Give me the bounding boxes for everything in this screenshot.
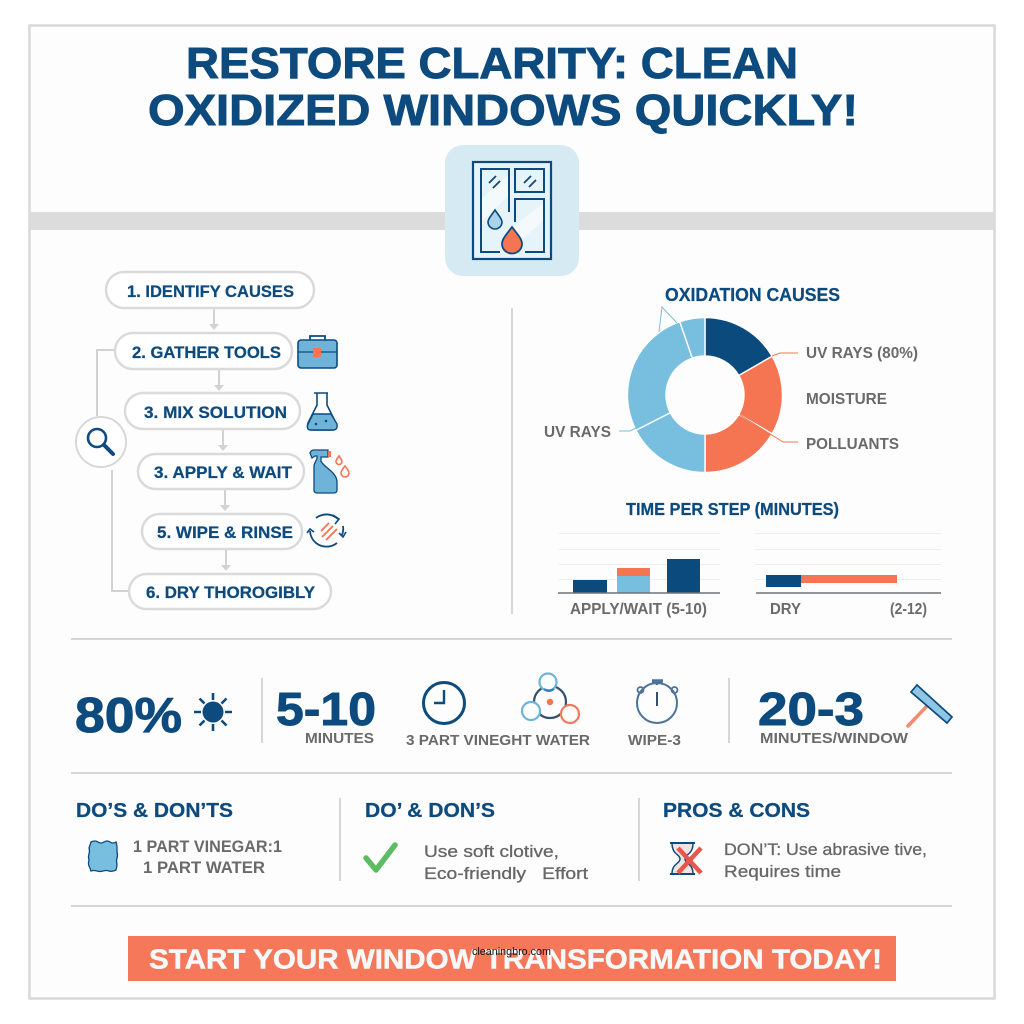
step 2 (115, 333, 292, 369)
icon: check mark (366, 845, 395, 870)
icon: wipe and rinse arrows (307, 514, 346, 547)
ratio text: 1 PART VINEGAR:1 (133, 838, 282, 856)
icon: sun (194, 693, 232, 731)
heading: PROS & CONS (663, 800, 810, 822)
heading: DO’ & DON’S (365, 800, 495, 822)
step 1: 1. IDENTIFY CAUSES (127, 283, 294, 301)
don't text (724, 840, 927, 881)
step 1 (106, 272, 314, 308)
do text: Use soft clotive, (424, 842, 559, 861)
panel: time per step (558, 499, 941, 618)
panel: process flow (76, 272, 349, 609)
title: RESTORE CLARITY: CLEAN (186, 39, 798, 88)
call to action banner (128, 936, 896, 981)
stat: vinegar water ratio: 3 PART VINEGHT WATER (406, 732, 590, 749)
stat: minutes per window: MINUTES/WINDOW (760, 730, 909, 747)
header band (30, 212, 994, 230)
panel: do's and don'ts (76, 800, 282, 877)
step 5: 5. WIPE & RINSE (157, 524, 293, 542)
chart axis labels: APPLY/WAIT (5-10) (570, 601, 707, 618)
ratio text: 1 PART WATER (143, 859, 265, 877)
chart axis labels: DRY (770, 601, 802, 618)
don't text: DON’T: Use abrasive tive, (724, 840, 927, 859)
icon: sponge (88, 841, 118, 872)
step 4: 3. APPLY & WAIT (154, 464, 292, 482)
panel: oxidation causes (544, 285, 918, 473)
panel: do and don's (365, 800, 588, 883)
stat: minutes per window (758, 683, 909, 747)
stat: 5-10 minutes: 5-10 (276, 683, 376, 735)
icon: hourglass with cross (670, 843, 701, 874)
don't text: Requires time (724, 862, 841, 881)
heading: DO’S & DON’TS (76, 800, 233, 822)
stat: minutes per window: 20-3 (758, 683, 864, 735)
heading: oxidation causes: OXIDATION CAUSES (665, 285, 840, 305)
connector lines (97, 350, 129, 591)
donut labels: POLLUANTS (806, 436, 899, 453)
chart axis labels (570, 601, 927, 618)
donut labels (544, 345, 918, 453)
divider between flow and charts (511, 308, 513, 614)
step 2: 2. GATHER TOOLS (132, 344, 281, 362)
icon: squeegee (908, 685, 952, 726)
call to action banner: START YOUR WINDOW TRANSFORMATION TODAY! (149, 944, 882, 974)
icon: toolbox (298, 336, 337, 368)
title: OXIDIZED WINDOWS QUICKLY! (148, 86, 858, 135)
donut chart (627, 318, 782, 473)
donut labels: UV RAYS (80%) (806, 345, 918, 362)
leader lines (619, 307, 798, 442)
flow arrows (209, 308, 231, 571)
icon: stopwatch (637, 681, 678, 723)
bar chart: apply and wait (558, 534, 720, 593)
watermark: cleaningbro.com (472, 946, 551, 958)
stat: 80 percent: 80% (75, 689, 182, 743)
icon: spray bottle (310, 450, 349, 493)
step 6 (129, 574, 331, 609)
ratio text (133, 838, 282, 877)
heading: time per step: TIME PER STEP (MINUTES) (626, 499, 839, 519)
do text: Eco-friendly Effort (424, 864, 588, 883)
bar chart: dry (755, 534, 941, 593)
stat: 5-10 minutes: MINUTES (305, 730, 374, 747)
icon: window with drops (445, 145, 579, 276)
donut labels: UV RAYS (544, 424, 611, 441)
panel: pros and cons (663, 800, 927, 881)
chart axis labels: (2-12) (890, 601, 927, 618)
step 5 (142, 514, 302, 549)
step 6: 6. DRY THOROGIBLY (146, 584, 315, 602)
step 3 (125, 393, 300, 429)
title (148, 39, 858, 135)
icon: clock (424, 682, 464, 724)
icon: molecule (522, 674, 579, 723)
step 3: 3. MIX SOLUTION (144, 404, 287, 422)
icon: flask (307, 393, 337, 430)
icon: magnifier (76, 417, 126, 467)
panel: key stats (75, 674, 952, 749)
do text (424, 842, 588, 883)
step 4 (138, 454, 304, 489)
donut labels: MOISTURE (806, 391, 887, 408)
stat: wipe: WIPE-3 (628, 732, 681, 749)
